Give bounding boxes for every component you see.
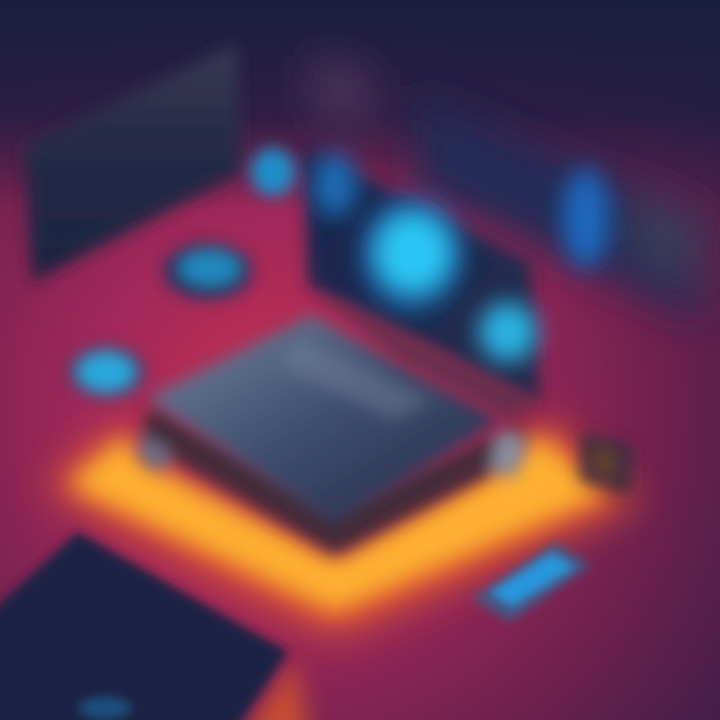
laptop base side (140, 405, 528, 555)
panel: top-left dark screen (24, 45, 242, 282)
icon: blue oval top right (562, 168, 610, 268)
lid edge shadow (324, 300, 536, 422)
icon: floating blue oval (164, 243, 252, 299)
orange glow bottom corner (240, 660, 310, 720)
laptop base top (148, 315, 498, 525)
panel: laptop base (140, 315, 528, 555)
icon: floating blue dot (251, 148, 295, 196)
icon: blue top glow (313, 153, 357, 217)
orange glowing outline (45, 420, 640, 635)
icon: floating cyan oval (69, 346, 145, 398)
panel: bottom-left dark tablet (0, 532, 288, 720)
icon: small dark device right (580, 432, 632, 495)
icon: blue phone device (472, 542, 592, 622)
icon: small cyan circle (479, 302, 537, 362)
panel: central laptop screen (305, 148, 540, 418)
panel: top-right faint screens (310, 55, 705, 320)
icon: large cyan circle (360, 196, 464, 312)
